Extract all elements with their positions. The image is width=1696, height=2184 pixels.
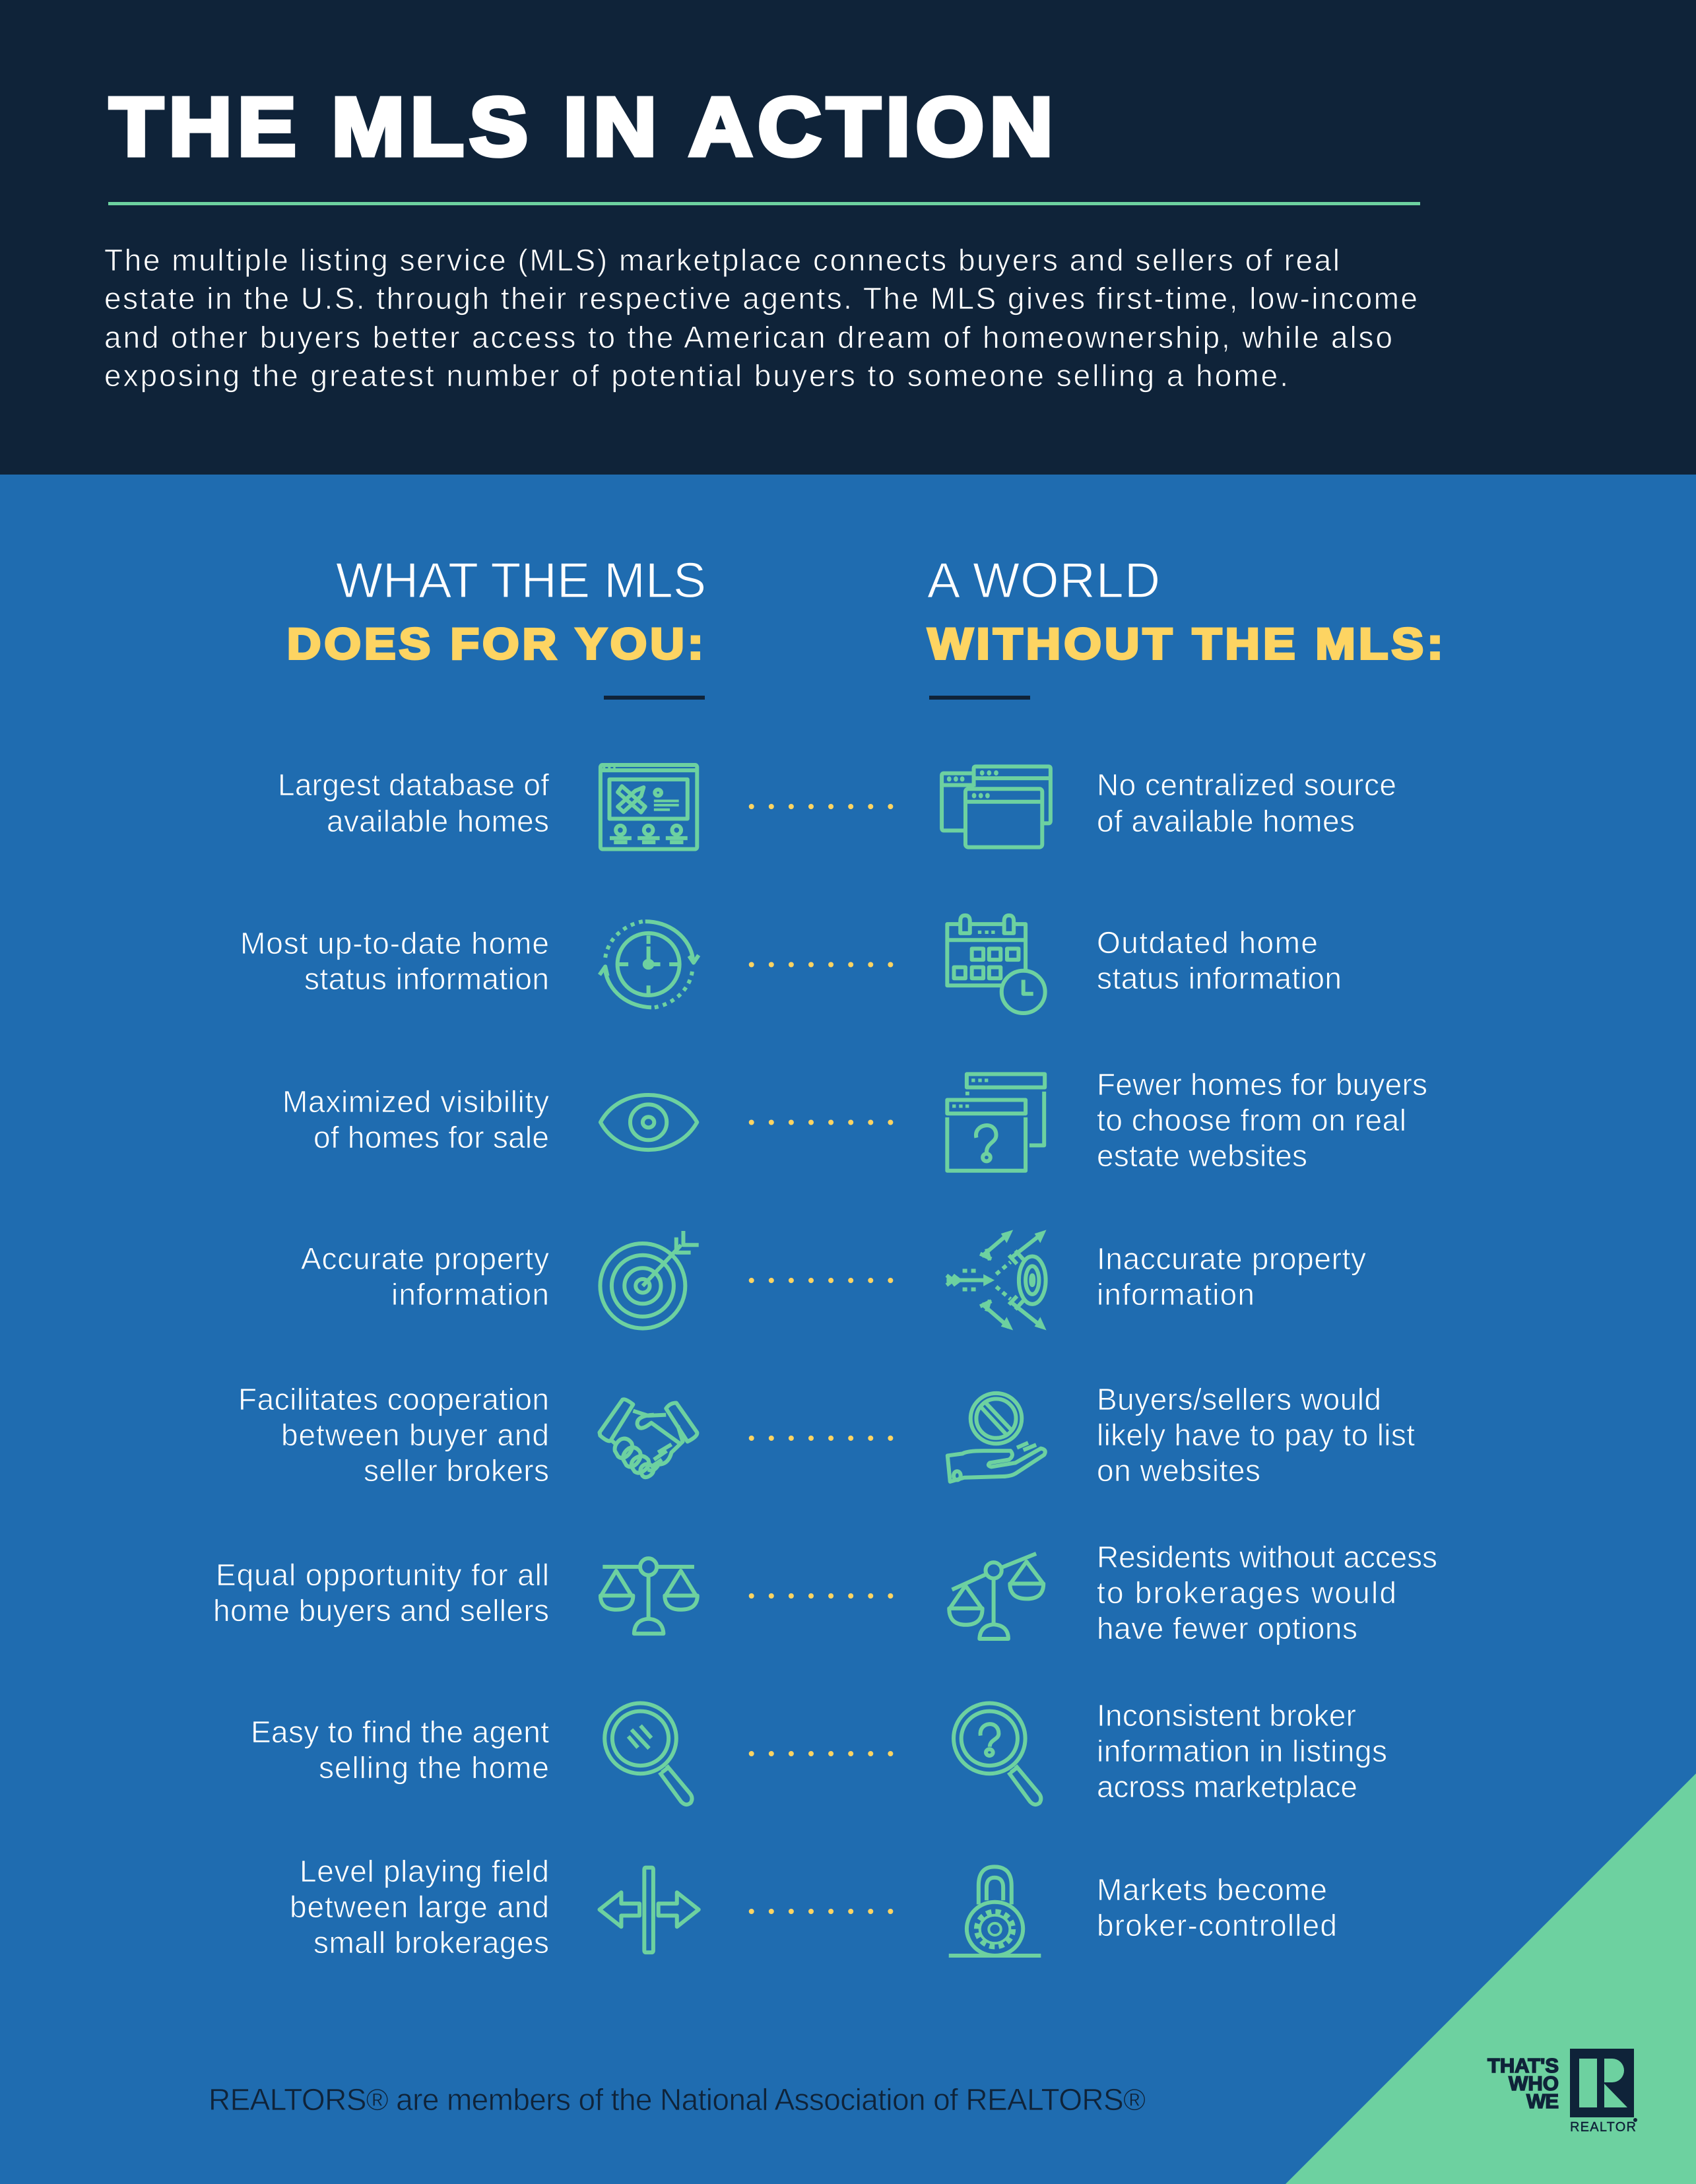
icon: target with arrow <box>600 1231 699 1329</box>
icon: calendar with clock <box>947 915 1045 1013</box>
right text: on websites <box>1097 1453 1260 1488</box>
panel: blue background <box>0 475 1696 2184</box>
icon: magnifying glass with question mark <box>954 1704 1041 1804</box>
left text: Equal opportunity for all <box>216 1558 549 1592</box>
right text <box>1097 1067 1427 1173</box>
dotted connector <box>752 1751 891 1756</box>
left text: Easy to find the agent <box>251 1715 549 1749</box>
right text: estate websites <box>1097 1139 1307 1173</box>
right text: broker-controlled <box>1097 1908 1337 1942</box>
row 4 <box>301 1230 1366 1330</box>
left text <box>240 926 549 996</box>
realtor R mark <box>1570 2049 1634 2117</box>
tagline <box>1487 2054 1559 2113</box>
left text: available homes <box>327 804 549 838</box>
right text <box>1097 1872 1337 1942</box>
icon: windows with question mark <box>947 1074 1045 1171</box>
icon: arrows from dividing line <box>599 1868 699 1952</box>
left text: seller brokers <box>364 1453 549 1488</box>
icon: browser window with tools <box>601 765 697 849</box>
left text: status information <box>304 962 549 996</box>
icon: hand with no-sign coin <box>948 1393 1045 1482</box>
left text <box>278 768 549 838</box>
row 1 <box>278 765 1396 849</box>
corner triangle <box>1286 1773 1696 2184</box>
right text: have fewer options <box>1097 1611 1357 1645</box>
dotted connector <box>752 804 891 809</box>
intro paragraph: estate in the U.S. through their respective agents. The MLS gives first-time, low-income <box>104 281 1418 315</box>
tagline: THAT'S <box>1487 2054 1559 2077</box>
left text: Most up-to-date home <box>240 926 549 960</box>
row 7 <box>251 1698 1387 1804</box>
dotted connector <box>752 1909 891 1914</box>
heading: a world without the MLS <box>927 552 1447 700</box>
left text <box>282 1084 549 1154</box>
right text <box>1097 1241 1366 1311</box>
heading: a world without the MLS: WITHOUT THE MLS: <box>928 619 1447 668</box>
left text <box>290 1854 549 1960</box>
right text <box>1097 1540 1437 1645</box>
right text: information <box>1097 1277 1255 1311</box>
icon: handshake <box>599 1399 697 1477</box>
right text: of available homes <box>1097 804 1355 838</box>
right text: Buyers/sellers would <box>1097 1382 1381 1416</box>
row 3 <box>282 1067 1427 1173</box>
heading: what the MLS does for you <box>287 552 707 700</box>
icon: padlock with gear <box>949 1867 1041 1956</box>
intro paragraph <box>104 243 1418 393</box>
icon: stacked browser windows <box>942 766 1051 847</box>
icon: balanced scales <box>601 1558 698 1634</box>
row 6 <box>213 1540 1437 1645</box>
right text: Inaccurate property <box>1097 1241 1366 1276</box>
title: THE MLS IN ACTION <box>110 81 1059 173</box>
right text: likely have to pay to list <box>1097 1418 1415 1452</box>
icon: clock with cycle arrows <box>599 921 699 1007</box>
heading: what the MLS does for you: DOES FOR YOU: <box>287 619 707 668</box>
right text <box>1097 768 1396 838</box>
left text: Maximized visibility <box>282 1084 549 1119</box>
right text <box>1097 1382 1415 1488</box>
icon: magnifying glass <box>604 1704 692 1804</box>
dotted connector <box>752 1436 891 1441</box>
intro paragraph: The multiple listing service (MLS) marketplace connects buyers and sellers of real <box>104 243 1340 277</box>
right text: information in listings <box>1097 1734 1387 1768</box>
left text: home buyers and sellers <box>213 1593 549 1628</box>
row 8 <box>290 1854 1337 1960</box>
heading: what the MLS does for you: WHAT THE MLS <box>336 552 706 608</box>
left text: selling the home <box>319 1750 549 1785</box>
dotted connector <box>752 1593 891 1599</box>
right text: Fewer homes for buyers <box>1097 1067 1427 1102</box>
left text: between buyer and <box>281 1418 549 1452</box>
left text: information <box>391 1277 549 1311</box>
right text: across marketplace <box>1097 1770 1357 1804</box>
icon: eye <box>601 1095 697 1150</box>
left text: between large and <box>290 1890 549 1924</box>
panel: header <box>0 0 1696 475</box>
icon: arrows missing target <box>946 1230 1047 1330</box>
row 5 <box>238 1382 1415 1488</box>
realtor wordmark: REALTOR <box>1570 2120 1636 2134</box>
right text: No centralized source <box>1097 768 1396 802</box>
right text: to brokerages would <box>1097 1575 1396 1610</box>
left text: Accurate property <box>301 1241 549 1276</box>
tagline: WE <box>1526 2090 1559 2113</box>
left text: Largest database of <box>278 768 549 802</box>
left text <box>251 1715 549 1785</box>
heading: a world without the MLS: A WORLD <box>927 552 1160 608</box>
intro paragraph: exposing the greatest number of potential buyers to someone selling a home. <box>104 358 1288 393</box>
left text <box>238 1382 549 1488</box>
logo: that's who we realtor <box>1487 2049 1637 2134</box>
right text: Outdated home <box>1097 925 1318 960</box>
intro paragraph: and other buyers better access to the American dream of homeownership, while also <box>104 320 1392 354</box>
left text <box>301 1241 549 1311</box>
right text <box>1097 925 1342 995</box>
left text: Level playing field <box>300 1854 549 1888</box>
dotted connector <box>752 1119 891 1125</box>
left text <box>213 1558 549 1628</box>
right text: to choose from on real <box>1097 1103 1406 1137</box>
left text: Facilitates cooperation <box>238 1382 549 1416</box>
footer note: REALTORS® are members of the National Association of REALTORS® <box>209 2082 1146 2117</box>
title underline <box>108 202 1420 205</box>
dotted connector <box>752 962 891 968</box>
right text: Residents without access <box>1097 1540 1437 1574</box>
row 2 <box>240 915 1342 1013</box>
tagline: WHO <box>1509 2072 1559 2095</box>
right text: status information <box>1097 961 1342 995</box>
right text <box>1097 1698 1387 1804</box>
left text: small brokerages <box>313 1925 549 1960</box>
dotted connector <box>752 1278 891 1283</box>
right text: Inconsistent broker <box>1097 1698 1356 1733</box>
left text: of homes for sale <box>313 1120 549 1154</box>
right text: Markets become <box>1097 1872 1327 1907</box>
icon: tilted scales <box>949 1554 1043 1639</box>
